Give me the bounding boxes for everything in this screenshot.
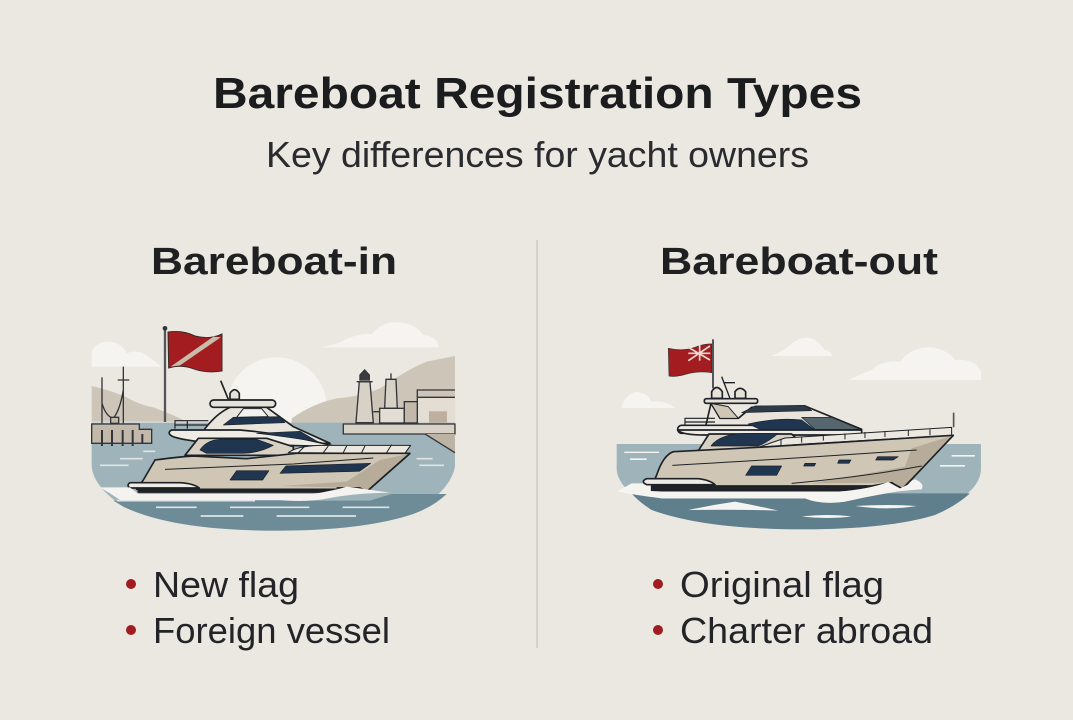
hills: [92, 386, 187, 422]
subtitle: Key differences for yacht owners: [266, 134, 809, 175]
bullet text: new flag: New flag: [153, 564, 299, 605]
hull: [652, 435, 953, 488]
title: Bareboat Registration Types: [213, 69, 862, 118]
bullet text: foreign vessel: Foreign vessel: [153, 610, 390, 651]
bullet list: bareboat-out: [653, 564, 933, 651]
heading: bareboat-out: Bareboat-out: [660, 241, 938, 283]
bullet text: charter abroad: Charter abroad: [680, 610, 933, 651]
water: [92, 423, 455, 531]
wake and wave highlights: [617, 452, 975, 518]
sea: [617, 444, 981, 529]
yacht: [643, 377, 954, 491]
bullet: [653, 625, 663, 635]
clouds: [622, 338, 981, 408]
bullet: [126, 579, 136, 589]
yacht: [128, 381, 411, 492]
right pier, lighthouse and buildings: [343, 370, 455, 453]
flag pole and flag: [163, 326, 222, 422]
illustration: open sea scene with yacht: [617, 338, 981, 529]
flag pole and red ensign: [668, 339, 713, 388]
heading: bareboat-in: Bareboat-in: [151, 241, 397, 283]
hull: [137, 453, 410, 492]
bullet: [126, 625, 136, 635]
bow wave: [628, 481, 919, 503]
clouds and sun: [92, 322, 438, 457]
wake: [100, 487, 390, 501]
left pier: [92, 367, 152, 446]
bullet: [653, 579, 663, 589]
bullet text: original flag: Original flag: [680, 564, 884, 605]
cabin: [698, 434, 805, 451]
cabin: [185, 438, 293, 455]
bullet list: bareboat-in: [126, 564, 390, 651]
illustration: harbour scene with yacht: [92, 322, 455, 531]
